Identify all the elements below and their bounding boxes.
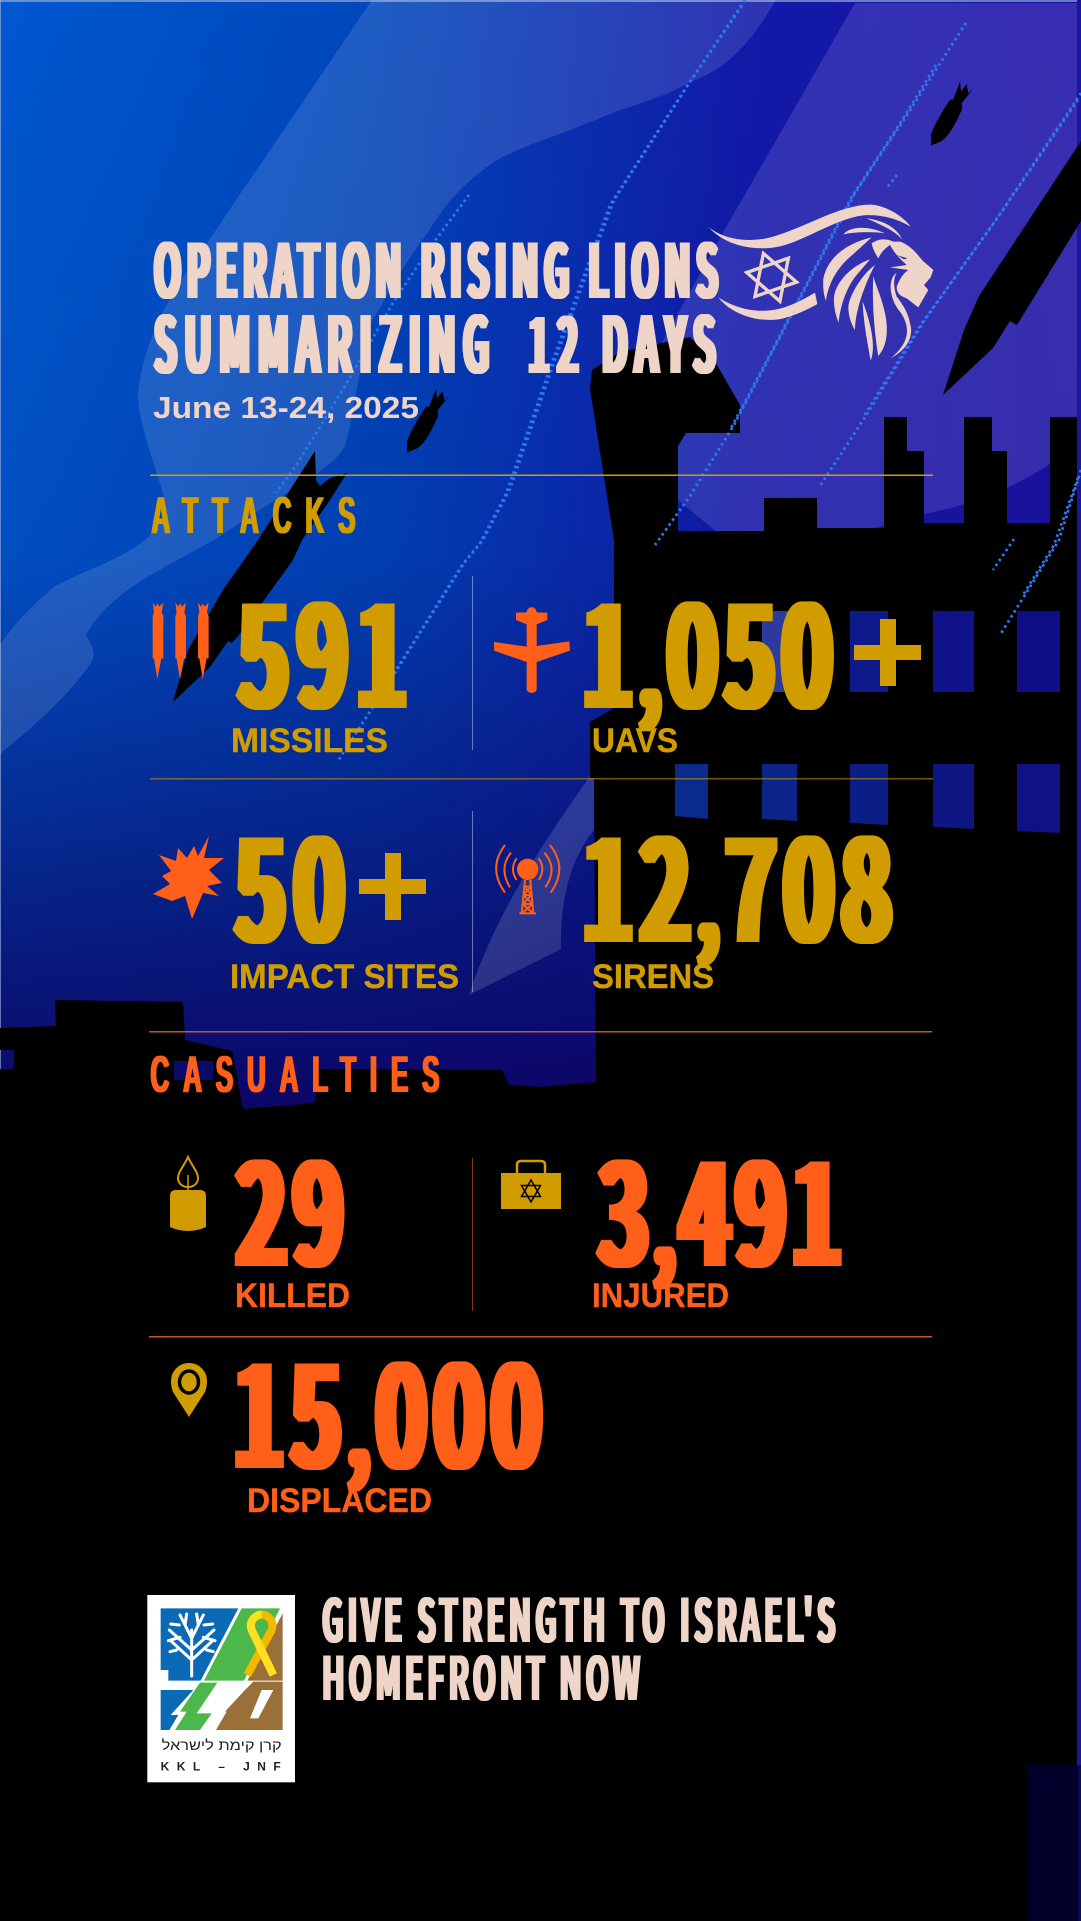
silhouette: small bomb center bbox=[407, 389, 449, 453]
call to action bbox=[322, 1572, 836, 1718]
silhouette: large missile right bbox=[943, 141, 1081, 395]
dotted missile trails bbox=[276, 0, 1081, 761]
title: SUMMARIZING 12 DAYS bbox=[154, 282, 716, 396]
title bbox=[154, 211, 718, 396]
icon: drone bbox=[494, 607, 570, 693]
date: June 13-24, 2025 bbox=[153, 390, 419, 425]
icon: location pin bbox=[171, 1363, 207, 1417]
logo: KKL-JNF: KKL – JNF bbox=[161, 1760, 281, 1774]
logo: lion and flag bbox=[708, 205, 933, 361]
background: light swoosh left bbox=[0, 0, 776, 754]
stat: 3,491 injured: 3,491 bbox=[598, 1099, 842, 1308]
stat: 15,000 displaced: 15,000 bbox=[233, 1301, 542, 1510]
icon: siren tower bbox=[496, 845, 559, 913]
stat: 15,000 displaced: DISPLACED bbox=[247, 1482, 432, 1520]
divider: casualties middle bbox=[149, 1336, 932, 1338]
icon: explosion bbox=[153, 836, 224, 919]
stat: 50+ impact sites bbox=[230, 775, 459, 996]
silhouette: small bomb upper right bbox=[931, 82, 973, 146]
icon: medical bag bbox=[501, 1161, 561, 1209]
stat: 591 missiles: MISSILES bbox=[231, 722, 388, 760]
divider: attacks top bbox=[150, 474, 933, 476]
divider: vertical attacks row 2 bbox=[472, 811, 473, 992]
stat: 12,708 sirens: SIRENS bbox=[592, 958, 714, 996]
stat: 29 killed: 29 bbox=[236, 1099, 344, 1308]
call to action: HOMEFRONT NOW bbox=[322, 1630, 640, 1718]
divider: casualties top bbox=[149, 1031, 932, 1032]
logo: KKL-JNF bbox=[147, 1595, 295, 1782]
call to action: GIVE STRENGTH TO ISRAEL'S bbox=[322, 1572, 836, 1660]
stat: 50+ impact sites: IMPACT SITES bbox=[230, 958, 459, 996]
icon: three missiles bbox=[153, 603, 209, 679]
logo: KKL-JNF: קרן קימת לישראל bbox=[162, 1737, 282, 1753]
stat: 591 missiles: 591 bbox=[238, 541, 407, 750]
stat: 12,708 sirens: 12,708 bbox=[582, 775, 892, 984]
divider: vertical attacks row 1 bbox=[472, 576, 473, 750]
heading: casualties: CASUALTIES bbox=[151, 1045, 439, 1103]
divider: vertical casualties bbox=[472, 1158, 473, 1311]
stat: 3,491 injured: INJURED bbox=[592, 1277, 729, 1315]
heading: attacks: ATTACKS bbox=[152, 486, 356, 544]
divider: attacks middle bbox=[150, 778, 933, 780]
background: light swoosh right bbox=[630, 3, 1081, 532]
stat: 1,050+ uavs: 1,050 bbox=[582, 541, 833, 750]
background: light swoosh lower bbox=[469, 770, 594, 995]
stat: 1,050+ uavs: UAVS bbox=[592, 722, 678, 760]
stat: 29 killed: KILLED bbox=[235, 1277, 350, 1315]
silhouette: large missile left bbox=[173, 451, 347, 702]
title: OPERATION RISING LIONS bbox=[154, 211, 718, 320]
stat: 50+ impact sites: 50 bbox=[235, 775, 345, 984]
icon: memorial candle bbox=[170, 1157, 206, 1231]
